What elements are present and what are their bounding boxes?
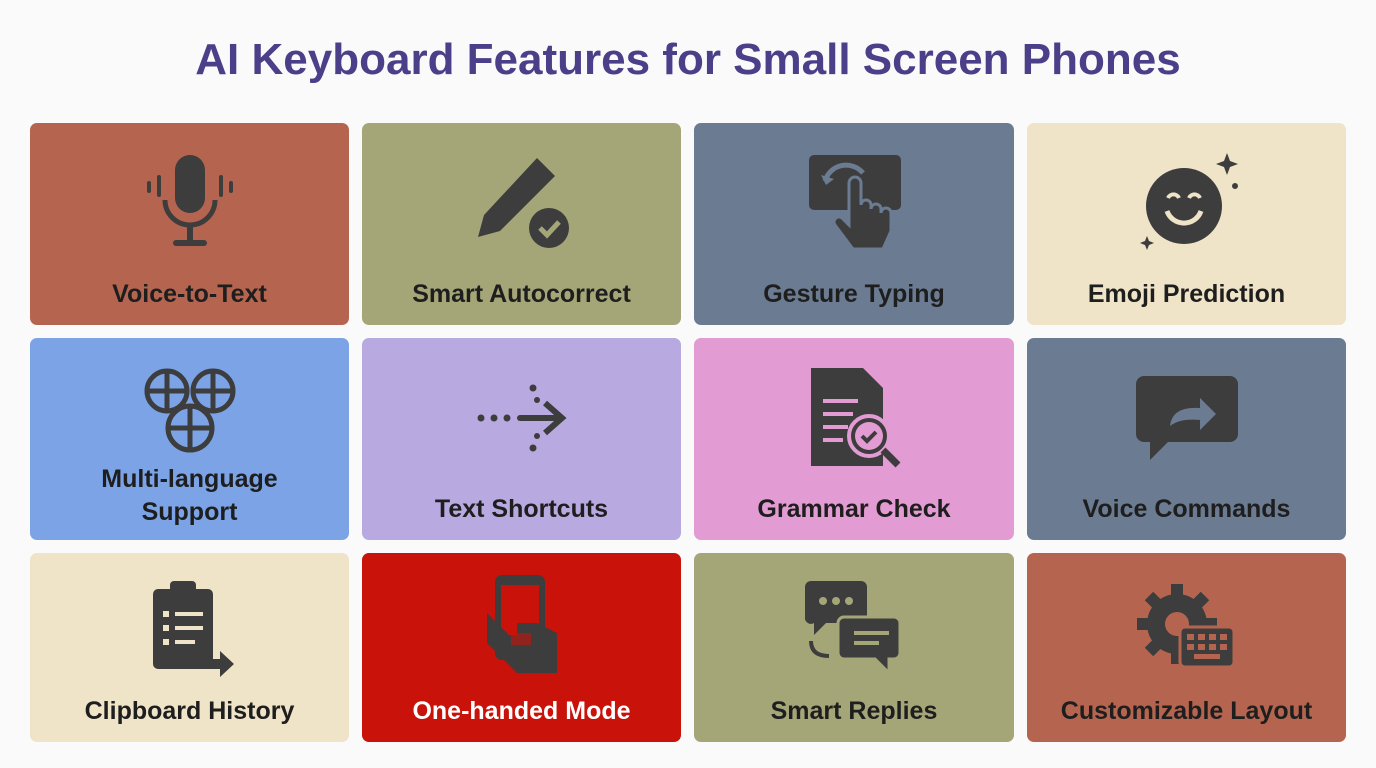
panel: Customizable Layout [1027, 553, 1346, 742]
icon: document magnifier [811, 368, 900, 468]
icon: smiley [1140, 153, 1238, 250]
icon: pencil check [478, 158, 569, 248]
panel: Voice Commands: Voice Commands [1083, 495, 1290, 523]
panel: Smart Replies: Smart Replies [771, 697, 937, 725]
panel: Smart Autocorrect [362, 123, 681, 325]
icon: clipboard [153, 581, 234, 677]
panel: Grammar Check [694, 338, 1014, 540]
panel: One-handed Mode [362, 553, 681, 742]
panel: Grammar Check: Grammar Check [757, 495, 951, 523]
panel: Voice Commands [1027, 338, 1346, 540]
title: AI Keyboard Features for Small Screen Phones [195, 35, 1181, 84]
icon: chat arrow [1136, 376, 1238, 460]
panel: Customizable Layout: Customizable Layout [1061, 697, 1312, 725]
panel: Smart Autocorrect: Smart Autocorrect [412, 280, 631, 308]
panel: Emoji Prediction: Emoji Prediction [1088, 280, 1285, 308]
panel: Smart Replies [694, 553, 1014, 742]
panel: Multi-language Support [30, 338, 349, 540]
icon: chat bubbles [804, 581, 898, 670]
panel: Multi-language Support: Support [142, 498, 237, 526]
panel: Voice-to-Text [30, 123, 349, 325]
panel: Text Shortcuts: Text Shortcuts [435, 495, 608, 523]
panel: Text Shortcuts [362, 338, 681, 540]
panel: Voice-to-Text: Voice-to-Text [112, 280, 267, 308]
panel: One-handed Mode: One-handed Mode [412, 697, 631, 725]
panel: Multi-language Support: Multi-language [101, 465, 278, 493]
panel: Emoji Prediction [1027, 123, 1346, 325]
panel: Clipboard History: Clipboard History [85, 697, 294, 725]
icon: globes [144, 368, 236, 452]
icon: microphone [147, 155, 233, 246]
icon: dotted arrow [478, 384, 566, 452]
panel: Gesture Typing: Gesture Typing [763, 280, 945, 308]
icon: hand phone [487, 575, 557, 673]
panel: Gesture Typing [694, 123, 1014, 325]
panel: Clipboard History [30, 553, 349, 742]
icon: gear keyboard [1137, 584, 1232, 666]
icon: swipe hand [809, 155, 901, 248]
